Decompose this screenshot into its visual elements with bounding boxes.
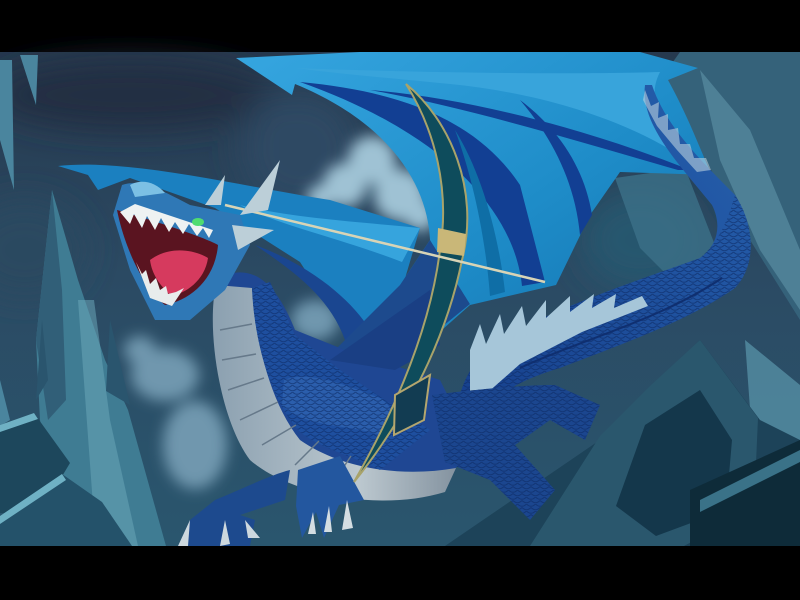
near wing [236,52,712,372]
far front leg [178,470,290,546]
bright clouds [124,136,436,489]
body [213,272,470,501]
bow [354,84,467,482]
arrow [225,205,545,282]
far wing [58,165,420,340]
gothic tower left [0,55,166,546]
dark storm clouds [0,60,700,300]
shoulder [330,290,440,370]
foreground rocks right [445,340,800,546]
hind leg [432,385,600,520]
foreground rocks left [0,413,132,546]
head [113,160,280,320]
gothic buildings right [615,52,800,546]
tail [460,85,751,430]
near front leg [296,456,364,538]
wing ribs [300,82,690,286]
